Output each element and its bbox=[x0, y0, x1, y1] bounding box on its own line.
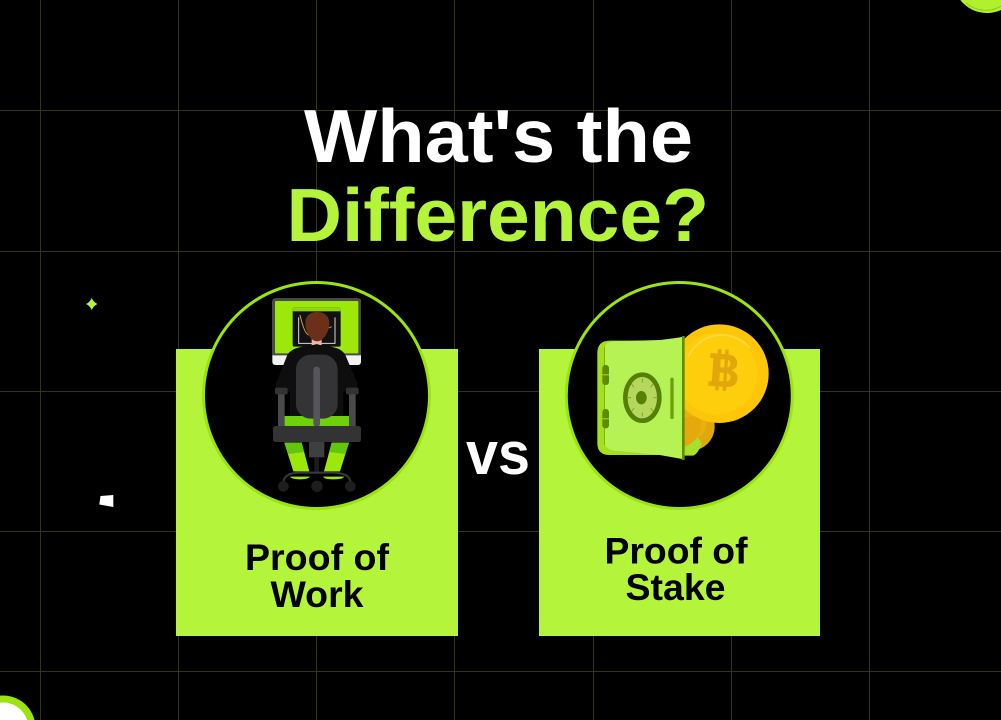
title line: Difference?: Difference? bbox=[286, 173, 709, 257]
decoration: bottom left ring bbox=[0, 695, 34, 720]
decoration: white fragment bbox=[99, 495, 113, 507]
circle badge bbox=[204, 282, 430, 508]
label: Proof of Work: Proof of bbox=[245, 537, 390, 578]
decoration: top right green circle bbox=[960, 0, 1001, 13]
circle badge bbox=[566, 282, 792, 508]
icon: bitcoin symbol bbox=[708, 348, 739, 392]
label: Proof of Stake: Stake bbox=[626, 567, 726, 608]
panel: proof of work bbox=[176, 282, 458, 636]
title line: What's the: What's the bbox=[304, 94, 693, 178]
label: Proof of Work: Work bbox=[270, 574, 364, 615]
title bbox=[286, 94, 709, 257]
card background bbox=[176, 349, 458, 636]
label: Proof of Work bbox=[245, 537, 390, 615]
label: Proof of Stake bbox=[604, 530, 748, 608]
icon: safe with bitcoin bbox=[597, 324, 769, 460]
panel: proof of stake bbox=[539, 282, 820, 636]
label: Proof of Stake: Proof of bbox=[604, 530, 748, 572]
icon: person at computer bbox=[272, 298, 361, 492]
card background bbox=[539, 349, 820, 636]
vs label: vs bbox=[466, 420, 530, 487]
decoration: green sparkle bbox=[86, 298, 98, 310]
